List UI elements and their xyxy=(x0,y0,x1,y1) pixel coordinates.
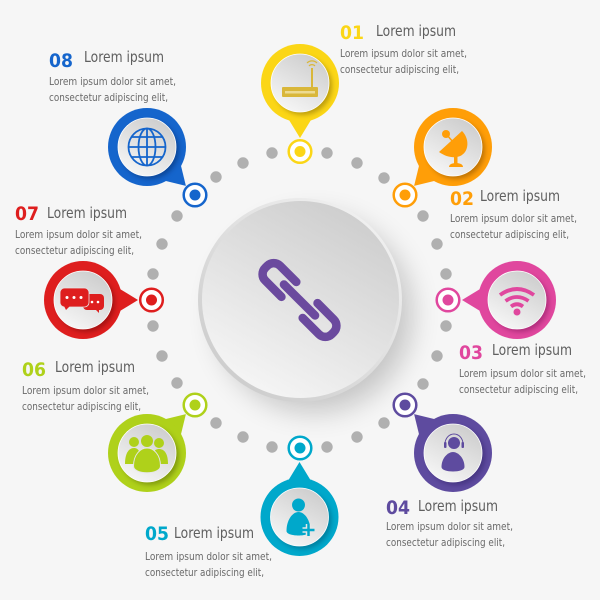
icon: satellite dish xyxy=(439,130,467,167)
text 06: 06 xyxy=(22,359,46,381)
text 05: consectetur adipiscing elit, xyxy=(145,566,264,579)
text 07: Lorem ipsum xyxy=(47,204,127,222)
text 07: consectetur adipiscing elit, xyxy=(15,244,134,257)
marker ring 03 xyxy=(437,289,459,311)
text 02: Lorem ipsum xyxy=(480,187,560,205)
icon: chat bubbles xyxy=(60,288,104,313)
text 02: 02 xyxy=(450,188,474,210)
marker ring 05 xyxy=(289,437,311,459)
text 04: 04 xyxy=(386,497,410,519)
pin 06 xyxy=(108,414,186,492)
text 05: Lorem ipsum xyxy=(174,524,254,542)
text 02 xyxy=(450,187,577,241)
text 08: Lorem ipsum xyxy=(84,48,164,66)
pin 02 xyxy=(414,108,492,186)
text 07: 07 xyxy=(15,203,39,225)
pin 07 xyxy=(44,261,138,339)
text 03 xyxy=(459,341,586,396)
text 04: consectetur adipiscing elit, xyxy=(386,536,505,549)
text 03: Lorem ipsum xyxy=(492,341,572,359)
icon: headset operator xyxy=(442,434,464,472)
text 04 xyxy=(386,497,513,549)
icon: chain link xyxy=(259,259,340,341)
text 08: Lorem ipsum dolor sit amet, xyxy=(49,75,176,88)
text 03: 03 xyxy=(459,342,483,364)
marker ring 02 xyxy=(394,184,416,206)
text 06: Lorem ipsum dolor sit amet, xyxy=(22,384,149,397)
text 05: 05 xyxy=(145,523,169,545)
text 07: Lorem ipsum dolor sit amet, xyxy=(15,228,142,241)
step 08 xyxy=(49,48,206,206)
text 01: Lorem ipsum xyxy=(376,22,456,40)
marker ring 08 xyxy=(184,184,206,206)
step 06 xyxy=(22,358,206,492)
text 02: consectetur adipiscing elit, xyxy=(450,228,569,241)
text 06: Lorem ipsum xyxy=(55,358,135,376)
icon: router xyxy=(282,61,318,97)
text 08: consectetur adipiscing elit, xyxy=(49,91,168,104)
text 04: Lorem ipsum xyxy=(418,497,498,515)
pin 01 xyxy=(261,44,339,138)
marker ring 01 xyxy=(289,140,311,163)
text 01 xyxy=(340,22,467,76)
text 07 xyxy=(15,203,142,257)
step 07 xyxy=(15,203,163,339)
marker ring 06 xyxy=(184,394,206,416)
marker ring 07 xyxy=(140,289,163,311)
text 06 xyxy=(22,358,149,413)
icon: add user xyxy=(286,498,314,536)
step 03 xyxy=(437,261,586,396)
text 05: Lorem ipsum dolor sit amet, xyxy=(145,550,272,563)
icon: wifi xyxy=(500,289,534,316)
text 05 xyxy=(145,523,272,579)
text 04: Lorem ipsum dolor sit amet, xyxy=(386,520,513,533)
step 02 xyxy=(394,108,577,241)
step 04 xyxy=(386,394,513,549)
icon: globe xyxy=(128,128,166,166)
text 08 xyxy=(49,48,176,104)
text 01: Lorem ipsum dolor sit amet, xyxy=(340,47,467,60)
text 08: 08 xyxy=(49,50,73,72)
icon: group of people xyxy=(125,435,168,473)
step 01 xyxy=(261,22,467,163)
central circle with link icon xyxy=(198,198,412,412)
marker ring 04 xyxy=(394,394,416,416)
pin 03 xyxy=(462,261,556,339)
text 01: 01 xyxy=(340,22,364,44)
pin 08 xyxy=(108,108,186,186)
pin 05 xyxy=(260,462,338,556)
text 01: consectetur adipiscing elit, xyxy=(340,63,459,76)
text 06: consectetur adipiscing elit, xyxy=(22,400,141,413)
step 05 xyxy=(145,437,338,579)
pin 04 xyxy=(414,414,492,492)
